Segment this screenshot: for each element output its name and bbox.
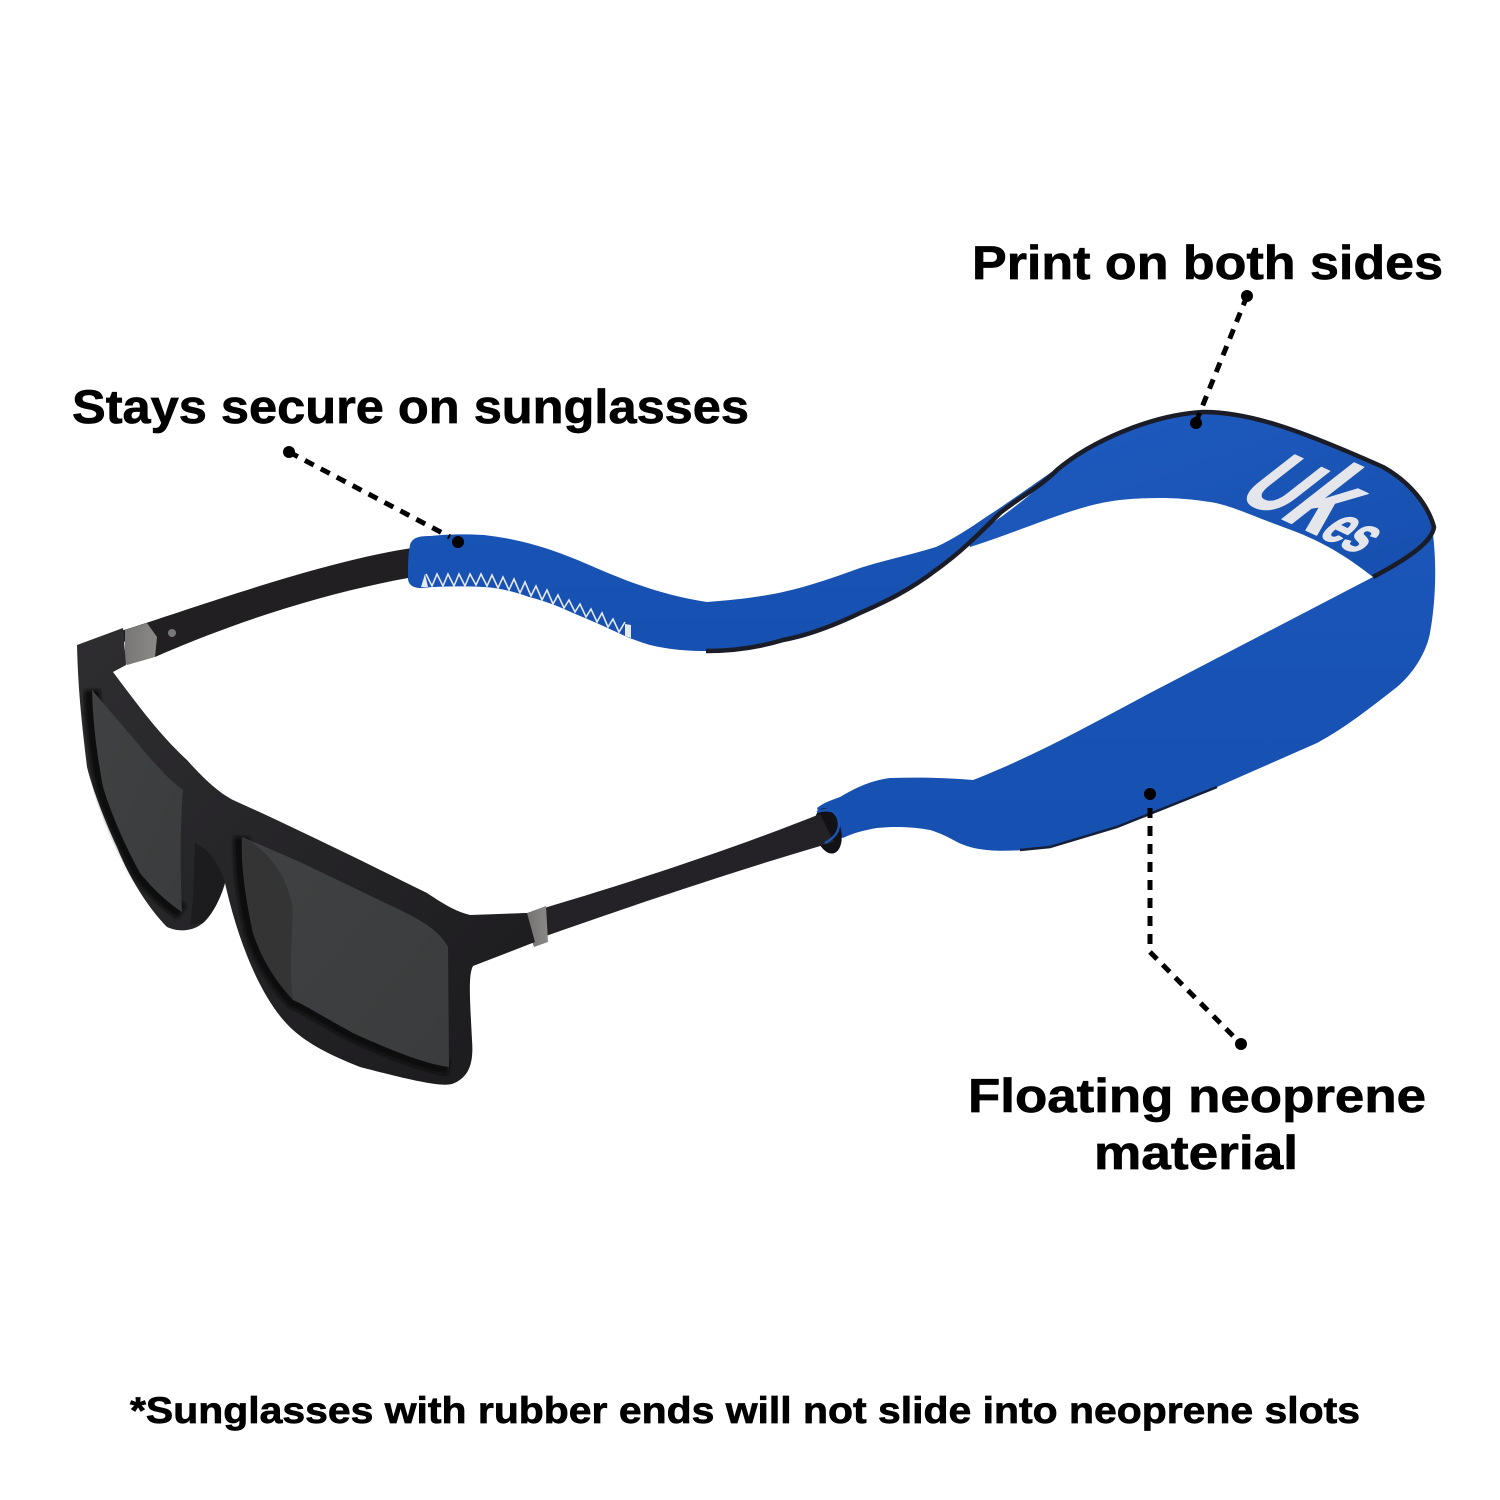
callout: stays secure [72, 380, 749, 548]
strap: dark rim [706, 412, 1434, 651]
strap: outer band and near-side tail [817, 527, 1435, 851]
heading: floating neoprene: Floating neoprene [968, 1069, 1426, 1122]
footnote: *Sunglasses with rubber ends will not slide into neoprene slots [130, 1390, 1360, 1431]
heading: stays secure: Stays secure on sunglasses [72, 380, 749, 433]
leader line: print [1190, 290, 1253, 429]
right lens rim [242, 837, 449, 1067]
near temple arm [470, 806, 846, 965]
strap: front section with stitching [408, 466, 1060, 651]
stitch ends [421, 574, 631, 638]
strap slot lip [817, 810, 839, 843]
callout: print on both sides [972, 236, 1443, 429]
heading: print on both sides: Print on both sides [972, 236, 1443, 289]
left lens [92, 690, 183, 912]
right lens reflection [242, 837, 293, 1000]
right lens [242, 837, 449, 1067]
heading: floating neoprene [968, 1069, 1426, 1179]
leader line: secure [283, 446, 464, 548]
hinge: near side [522, 906, 548, 947]
temple end ring [810, 806, 846, 856]
hinge: far side [107, 623, 157, 665]
logo text: Ukes [1213, 428, 1446, 571]
sunglasses front frame [77, 628, 535, 1085]
nose pad [190, 843, 225, 925]
screw [168, 629, 176, 637]
strap: inner printed band [968, 411, 1446, 577]
heading: floating neoprene: material [1094, 1126, 1298, 1179]
far temple arm [107, 548, 412, 665]
left lens rim [92, 690, 182, 912]
stitching [426, 574, 625, 632]
callout: floating neoprene [968, 788, 1426, 1179]
leader line: floating [1144, 788, 1247, 1050]
